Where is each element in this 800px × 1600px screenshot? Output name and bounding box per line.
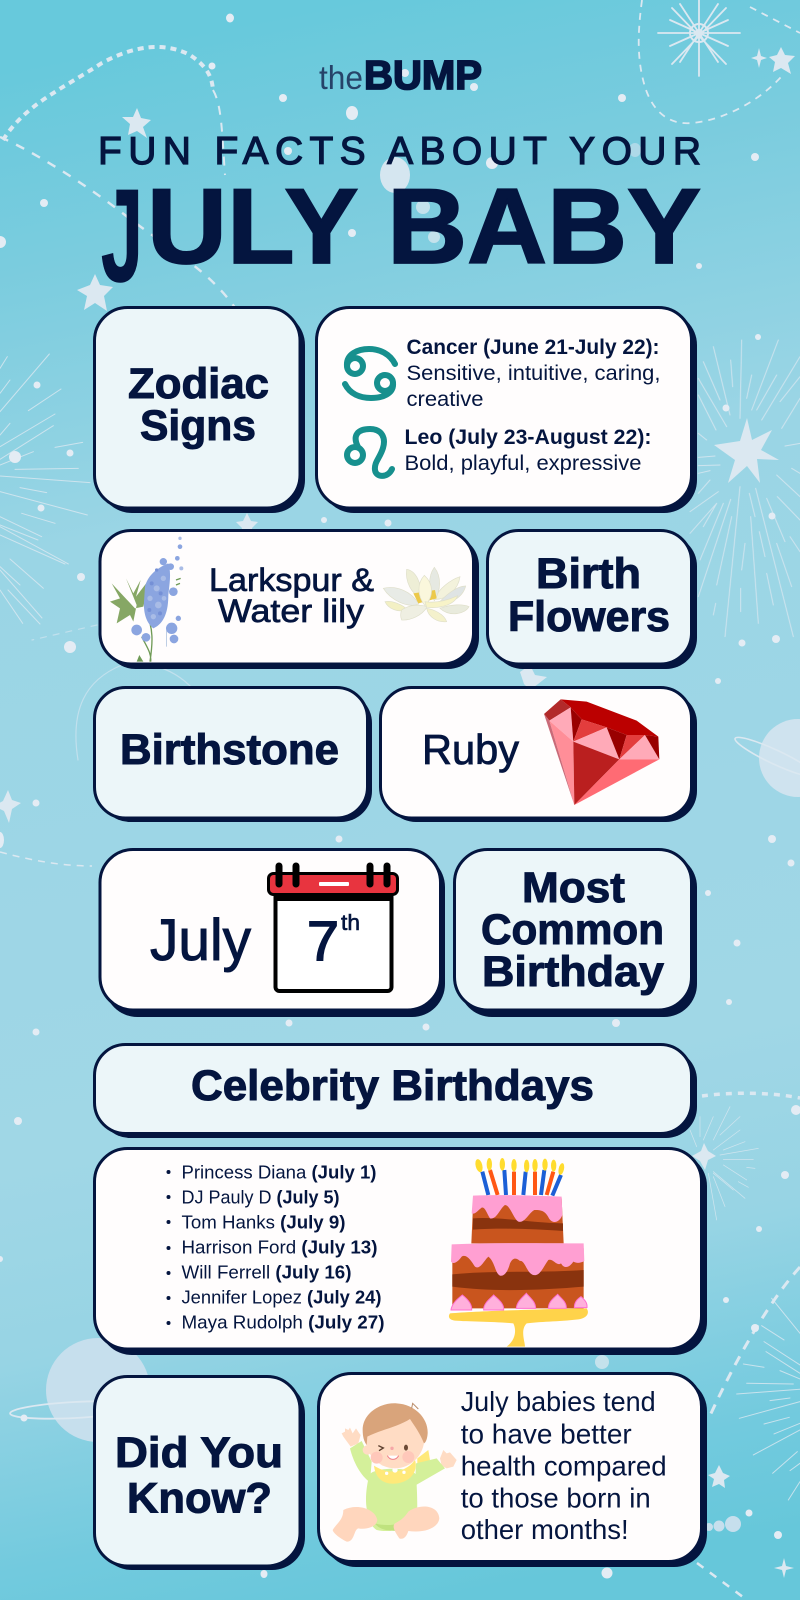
small firework — [690, 1107, 758, 1220]
title line one: FUN FACTS ABOUT YOUR — [98, 130, 701, 173]
panel: most common birthday heading — [454, 850, 697, 1017]
panel: birthstone heading: Birthstone — [120, 726, 339, 774]
text: did you know fact: to have better — [461, 1418, 632, 1450]
list of celebrity birthdays: Maya Rudolph (July 27) — [182, 1312, 384, 1332]
panel: did you know heading: Know? — [127, 1474, 272, 1522]
panel: most common birthday heading: Birthday — [482, 948, 664, 996]
left firework — [0, 354, 90, 623]
panel: zodiac signs heading: Zodiac — [128, 360, 269, 408]
panel: larkspur and water lily — [100, 530, 479, 669]
logo: theBUMP: BUMP — [364, 52, 482, 98]
list of celebrity birthdays — [166, 1162, 384, 1332]
list of celebrity birthdays: DJ Pauly D (July 5) — [182, 1186, 340, 1208]
icon: baby — [333, 1403, 457, 1542]
icon: water lily — [383, 567, 469, 622]
icon: cancer symbol — [345, 349, 395, 398]
leo text — [404, 426, 652, 475]
text: did you know fact: health compared — [461, 1450, 667, 1482]
panel: celebrity birthdays heading — [94, 1044, 697, 1138]
logo: theBUMP: the — [319, 59, 363, 96]
icon: larkspur — [110, 537, 183, 662]
title line two: ULY BABY — [147, 166, 701, 286]
title line two: J — [101, 162, 143, 309]
text: 7th: th — [341, 910, 360, 935]
text: larkspur and water lily: Water lily — [218, 593, 364, 629]
leo text: Bold, playful, expressive — [404, 452, 642, 475]
cancer text: Cancer (June 21-July 22): — [406, 336, 660, 359]
title — [98, 130, 701, 309]
text: larkspur and water lily: Larkspur & — [209, 562, 374, 598]
icon: birthday cake — [449, 1158, 588, 1347]
panel: birth flowers heading — [488, 530, 697, 669]
top right starburst — [658, 0, 740, 76]
panel: most common birthday heading: Most — [522, 864, 625, 912]
panel: july 7th — [100, 850, 445, 1017]
list of celebrity birthdays: Princess Diana (July 1) — [182, 1162, 376, 1182]
cancer text: Sensitive, intuitive, caring, — [406, 362, 660, 385]
panel: birth flowers heading: Flowers — [508, 593, 670, 641]
text: 7th: 7 — [307, 909, 339, 972]
text: larkspur and water lily — [209, 562, 374, 629]
panel: birth flowers heading: Birth — [536, 550, 641, 598]
cancer text: creative — [406, 388, 484, 411]
panel: ruby — [380, 688, 697, 822]
panel: celebrity list — [94, 1148, 707, 1355]
list of celebrity birthdays: Will Ferrell (July 16) — [182, 1262, 352, 1282]
panel: celebrity birthdays heading: Celebrity Birthdays — [191, 1062, 594, 1110]
list of celebrity birthdays: Harrison Ford (July 13) — [182, 1236, 378, 1258]
dashed orbits — [3, 47, 213, 140]
icon: ruby gem — [544, 699, 659, 805]
icon: calendar — [268, 866, 398, 991]
text: july: July — [150, 908, 251, 973]
panel: zodiac signs heading — [94, 308, 305, 513]
text: did you know fact — [461, 1386, 667, 1545]
cancer text — [406, 336, 660, 411]
panel: birthstone heading — [94, 688, 372, 822]
panel: did you know fact — [318, 1374, 707, 1567]
lower right firework — [737, 1298, 800, 1500]
text: did you know fact: to those born in — [461, 1482, 651, 1514]
text: ruby: Ruby — [422, 726, 519, 773]
planets — [759, 719, 800, 797]
panel: most common birthday heading: Common — [481, 906, 664, 954]
leo text: Leo (July 23-August 22): — [404, 426, 652, 449]
panel: zodiac details — [316, 308, 697, 513]
panel: did you know heading: Did You — [115, 1429, 283, 1477]
list of celebrity birthdays: Jennifer Lopez (July 24) — [182, 1286, 382, 1308]
right firework — [677, 340, 800, 637]
text: did you know fact: July babies tend — [461, 1386, 656, 1417]
text: 7th — [307, 909, 360, 972]
icon: leo symbol — [347, 429, 392, 476]
text: did you know fact: other months! — [461, 1514, 629, 1545]
panel: did you know heading — [94, 1376, 305, 1570]
panel: zodiac signs heading: Signs — [140, 402, 256, 450]
list of celebrity birthdays: Tom Hanks (July 9) — [182, 1212, 346, 1232]
